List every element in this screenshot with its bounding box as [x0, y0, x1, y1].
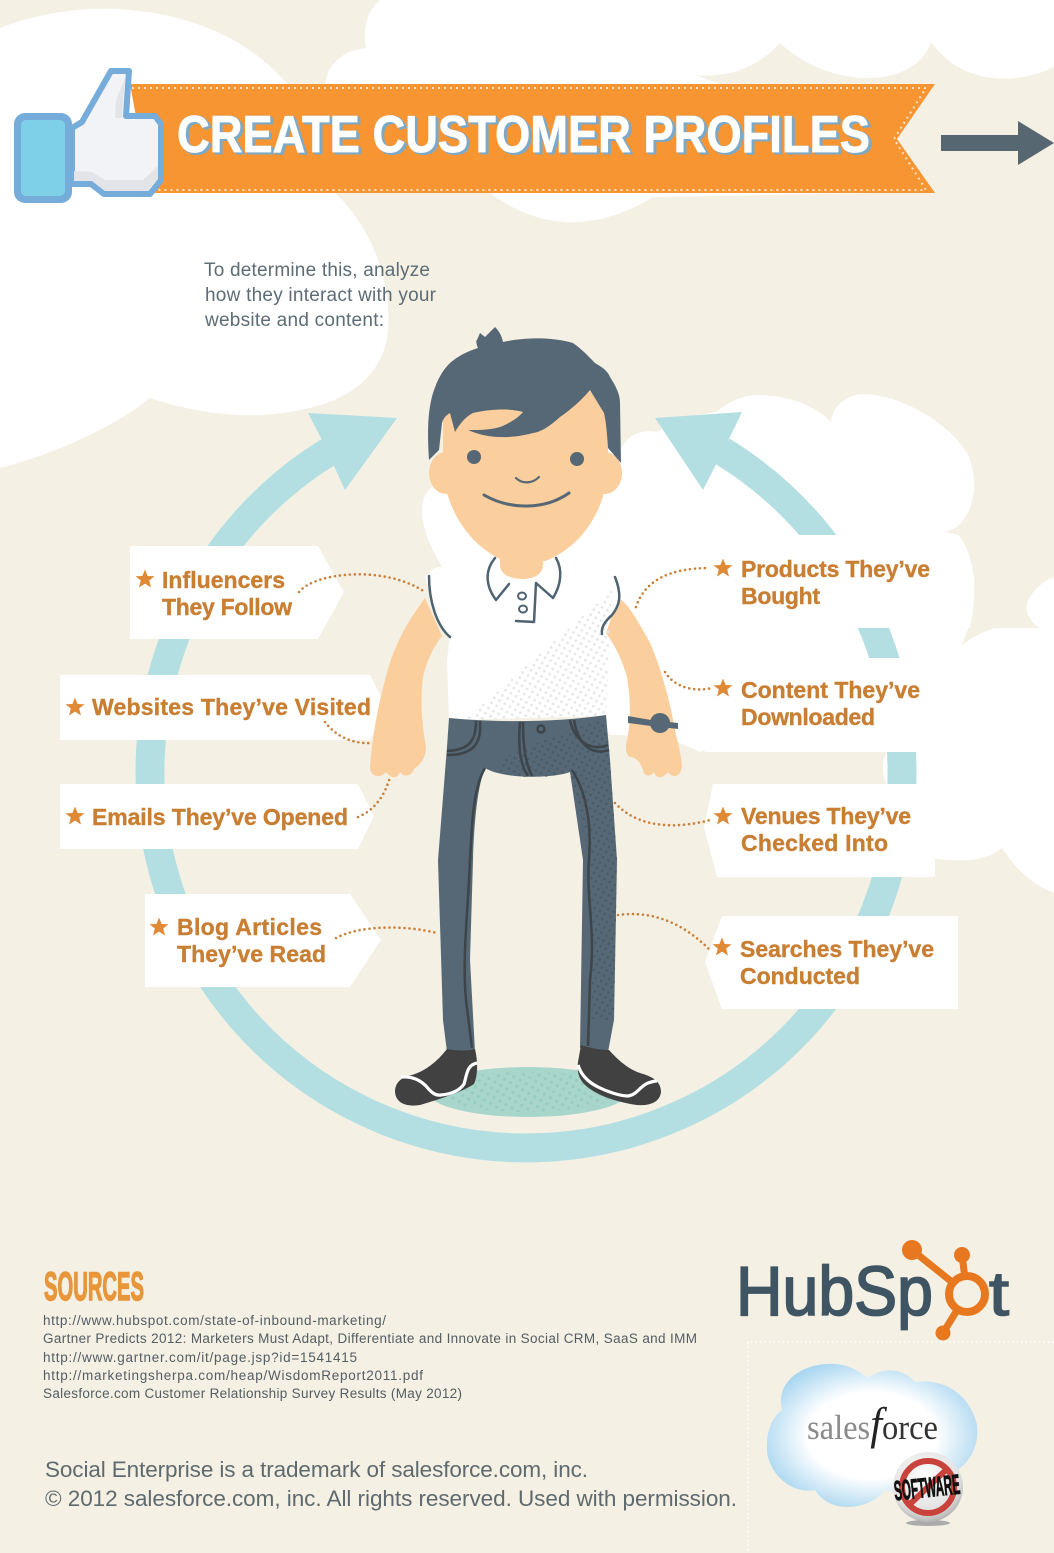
white callout panels [60, 535, 974, 1009]
panel: emails [60, 784, 374, 849]
salesforce cloud [767, 1364, 977, 1507]
jeans halftone [500, 718, 617, 1020]
logo: salesforce: SOFTWARE [893, 1469, 961, 1506]
floor shadow [428, 1067, 628, 1117]
cloud: middle right [422, 394, 974, 752]
shirt [429, 562, 621, 720]
panel: influencers [130, 546, 344, 639]
panel: blog [145, 894, 381, 987]
eyes [467, 450, 584, 466]
face [443, 385, 608, 561]
character [370, 327, 682, 1106]
logo: HubSpot [736, 1240, 1009, 1340]
title: CREATE CUSTOMER PROFILES [177, 106, 870, 164]
icon: right arrow [941, 121, 1054, 165]
cloud: lower right [883, 577, 1054, 893]
jeans stitching [447, 720, 609, 1048]
collar [488, 558, 560, 622]
shirt halftone [465, 590, 612, 720]
label: searches: Conducted [740, 963, 860, 989]
sources list [43, 1313, 697, 1401]
panel: venues [704, 784, 935, 877]
icon: thumbs up [14, 71, 161, 203]
salesforce wordmark: salesforce [807, 1398, 938, 1449]
right shoe stripe [578, 1065, 657, 1096]
intro text [204, 260, 437, 331]
cloud: top left [0, 9, 388, 468]
logo: HubSpot: t [989, 1260, 1009, 1329]
sources list: Salesforce.com Customer Relationship Survey Results (May 2012) [43, 1386, 462, 1401]
left arm [370, 598, 442, 777]
label: blog [150, 914, 326, 967]
cloud: top right [280, 0, 1054, 222]
clouds background [0, 0, 1054, 893]
label: content: Content They’ve [741, 677, 920, 703]
footer: Social Enterprise is a trademark of salesforce.com, inc. [45, 1457, 588, 1482]
label: influencers: Influencers [162, 567, 285, 593]
nose [516, 477, 539, 482]
footer: © 2012 salesforce.com, inc. All rights reserved. Used with permission. [45, 1486, 737, 1511]
watch [628, 713, 678, 733]
label: emails: Emails They’ve Opened [92, 804, 348, 830]
intro text: website and content: [204, 310, 384, 331]
label: influencers [136, 567, 292, 620]
intro text: To determine this, analyze [204, 260, 430, 281]
sources list: http://www.gartner.com/it/page.jsp?id=1541415 [43, 1350, 357, 1365]
right shoe [578, 1045, 661, 1105]
label: products: Bought [741, 583, 820, 609]
dotted connectors [299, 568, 712, 950]
label: searches: Searches They’ve [740, 936, 934, 962]
ears [429, 452, 622, 494]
label: content: Downloaded [741, 704, 875, 730]
jeans [438, 715, 617, 1052]
arrowhead: right [655, 412, 742, 490]
circular arrows ring [150, 412, 902, 1148]
labels [66, 556, 934, 989]
intro text: how they interact with your [205, 285, 437, 306]
left shoe stripe [401, 1063, 477, 1095]
sources list: http://www.hubspot.com/state-of-inbound-marketing/ [43, 1313, 386, 1328]
banner stitching [132, 88, 926, 190]
sources list: http://marketingsherpa.com/heap/WisdomReport2011.pdf [43, 1368, 423, 1383]
left shoe [395, 1049, 477, 1106]
label: venues: Checked Into [741, 830, 888, 856]
mouth [484, 493, 569, 506]
label: blog: Blog Articles [177, 914, 322, 940]
HubSpot sprocket [902, 1240, 985, 1340]
panel: products [640, 535, 974, 628]
label: venues [714, 803, 911, 856]
title banner [130, 84, 935, 193]
banner ribbon [130, 84, 935, 193]
footer [45, 1457, 737, 1511]
sources list: Gartner Predicts 2012: Marketers Must Adapt, Differentiate and Innovate in Social CRM, SaaS and IMM [43, 1331, 697, 1346]
label: products: Products They’ve [741, 556, 930, 582]
sleeve lines [429, 576, 619, 637]
label: websites: Websites They’ve Visited [92, 694, 371, 720]
cloud: white area around right arm [606, 600, 720, 745]
arrowhead: left [308, 413, 397, 490]
no software badge [893, 1452, 963, 1526]
label: influencers: They Follow [162, 594, 292, 620]
panel: searches [705, 916, 958, 1009]
panel: websites [60, 675, 386, 740]
label: content [714, 677, 920, 730]
dotted frame [748, 1342, 1054, 1553]
sources heading: SOURCES [44, 1265, 144, 1309]
label: products [714, 556, 930, 609]
panel: content [610, 658, 920, 752]
logo: salesforce [767, 1364, 977, 1526]
logo: HubSpot: HubSp [736, 1252, 933, 1330]
label: searches [712, 936, 934, 989]
jeans button [538, 726, 544, 732]
label: venues: Venues They’ve [741, 803, 911, 829]
neck [500, 550, 543, 579]
hair [428, 327, 621, 463]
shirt buttons [518, 592, 527, 612]
label: blog: They’ve Read [177, 941, 326, 967]
ring: arc [150, 451, 902, 1148]
right arm [606, 598, 682, 777]
